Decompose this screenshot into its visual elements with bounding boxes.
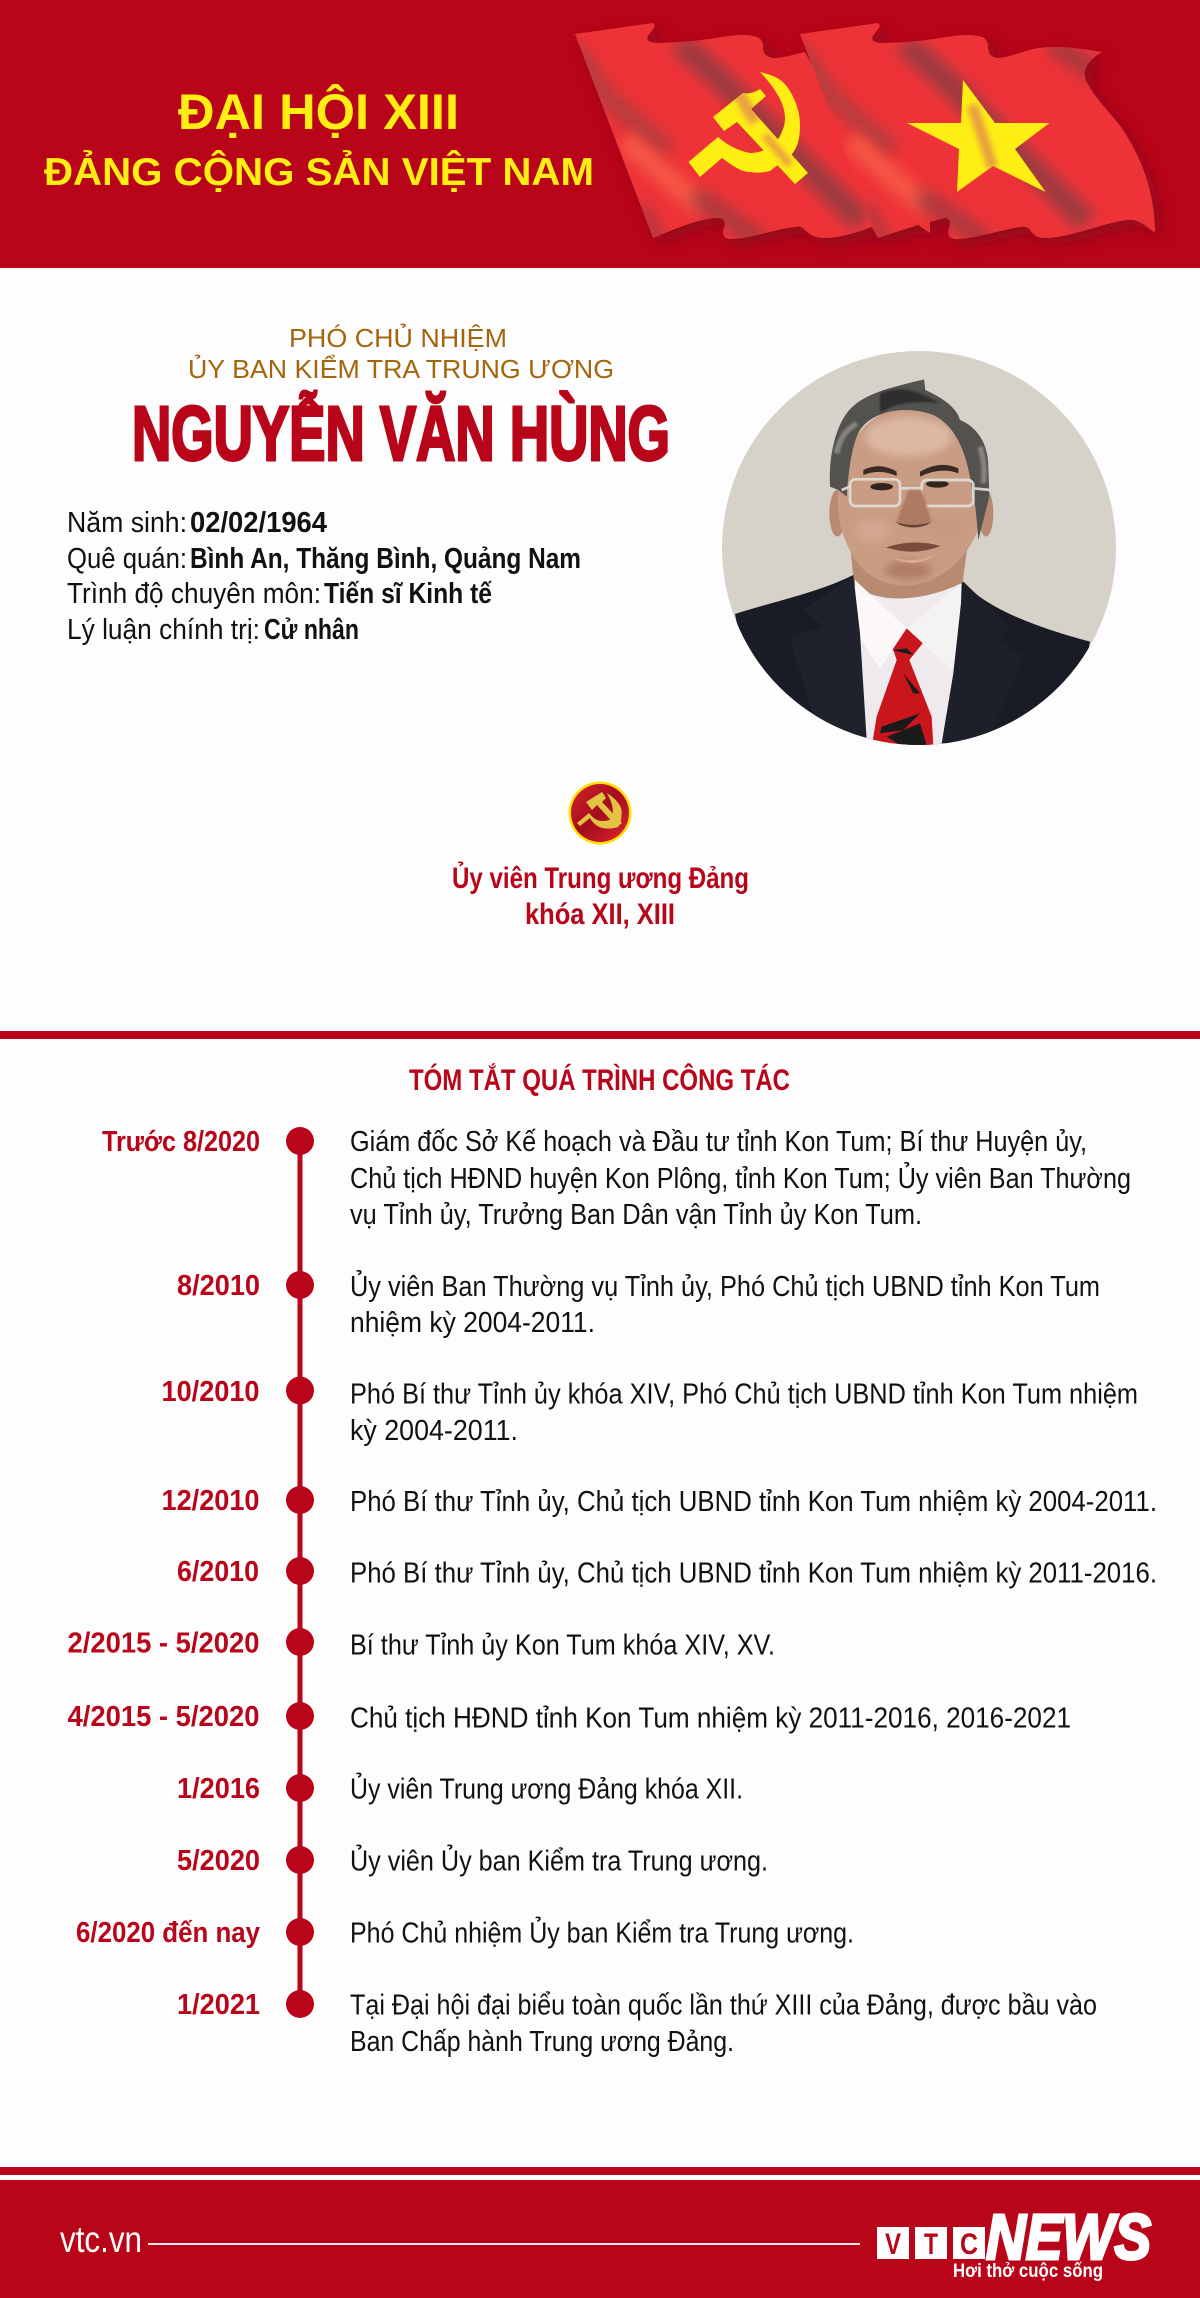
career descriptions: Tại Đại hội đại biểu toàn quốc lần thứ XIII của Đảng, được bầu vào bbox=[350, 1990, 1097, 2022]
membership text line 1: Ủy viên Trung ương Đảng bbox=[452, 861, 749, 895]
icon: party emblem bbox=[568, 782, 632, 844]
membership text line 2: khóa XII, XIII bbox=[525, 898, 675, 931]
dates: Trước 8/2020 bbox=[102, 1126, 260, 1158]
panel: header banner bbox=[0, 0, 1200, 268]
bio details: Lý luận chính trị: bbox=[67, 614, 260, 646]
flag with star bbox=[800, 23, 1155, 239]
name: NGUYỄN VĂN HÙNG bbox=[132, 390, 670, 477]
dates bbox=[68, 1126, 260, 2021]
position line 2: ỦY BAN KIỂM TRA TRUNG ƯƠNG bbox=[188, 353, 614, 384]
logo: VTC News: V bbox=[885, 2228, 901, 2261]
career descriptions: Ủy viên Trung ương Đảng khóa XII. bbox=[350, 1772, 743, 1806]
title line 1: ĐẠI HỘI XIII bbox=[178, 83, 459, 140]
logo: VTC News: C bbox=[960, 2228, 978, 2261]
logo: VTC News: NEWS bbox=[986, 2201, 1151, 2273]
career descriptions: vụ Tỉnh ủy, Trưởng Ban Dân vận Tỉnh ủy Kon Tum. bbox=[350, 1199, 922, 1231]
bio details: Bình An, Thăng Bình, Quảng Nam bbox=[190, 543, 581, 575]
bio details: Tiến sĩ Kinh tế bbox=[324, 578, 493, 610]
heading: career summary: TÓM TẮT QUÁ TRÌNH CÔNG TÁC bbox=[409, 1063, 790, 1097]
career descriptions bbox=[350, 1126, 1157, 2058]
career descriptions: Ban Chấp hành Trung ương Đảng. bbox=[350, 2026, 734, 2058]
bio details: Quê quán: bbox=[67, 543, 187, 575]
flag with hammer and sickle bbox=[575, 23, 878, 239]
dates: 1/2021 bbox=[177, 1989, 260, 2021]
career descriptions: kỳ 2004-2011. bbox=[350, 1415, 518, 1447]
section divider rule bbox=[0, 1031, 1200, 1039]
dates: 6/2020 đến nay bbox=[76, 1917, 260, 1949]
dates: 10/2010 bbox=[162, 1376, 260, 1408]
bio details: 02/02/1964 bbox=[190, 507, 327, 539]
dates: 2/2015 - 5/2020 bbox=[68, 1628, 260, 1660]
icon: hammer and sickle bbox=[688, 72, 808, 184]
logo: VTC News: T bbox=[924, 2228, 938, 2261]
portrait photo bbox=[722, 351, 1116, 773]
career descriptions: Ủy viên Ủy ban Kiểm tra Trung ương. bbox=[350, 1844, 768, 1878]
timeline bbox=[68, 1126, 1157, 2058]
bio details: Cử nhân bbox=[264, 614, 359, 646]
bio details: Năm sinh: bbox=[67, 507, 187, 539]
logo: VTC News: Hơi thở cuộc sống bbox=[953, 2261, 1103, 2282]
flags illustration bbox=[560, 10, 1170, 250]
timeline dots bbox=[286, 1127, 314, 2018]
icon: star bbox=[907, 80, 1050, 192]
panel: party membership bbox=[452, 782, 749, 931]
bio details: Trình độ chuyên môn: bbox=[67, 578, 321, 610]
dates: 12/2010 bbox=[162, 1485, 260, 1517]
career descriptions: Phó Chủ nhiệm Ủy ban Kiểm tra Trung ương. bbox=[350, 1916, 854, 1950]
dates: 4/2015 - 5/2020 bbox=[68, 1701, 260, 1733]
panel: profile bbox=[67, 322, 1116, 773]
career descriptions: Chủ tịch HĐND tỉnh Kon Tum nhiệm kỳ 2011-2016, 2016-2021 bbox=[350, 1702, 1071, 1734]
career descriptions: Ủy viên Ban Thường vụ Tỉnh ủy, Phó Chủ tịch UBND tỉnh Kon Tum bbox=[350, 1269, 1100, 1303]
dates: 8/2010 bbox=[177, 1270, 260, 1302]
footer line bbox=[148, 2243, 860, 2245]
timeline axis bbox=[298, 1141, 302, 2004]
position line 1: PHÓ CHỦ NHIỆM bbox=[289, 322, 507, 353]
panel: footer bbox=[0, 2167, 1200, 2298]
career descriptions: Giám đốc Sở Kế hoạch và Đầu tư tỉnh Kon Tum; Bí thư Huyện ủy, bbox=[350, 1126, 1087, 1158]
website: vtc.vn bbox=[60, 2219, 142, 2260]
dates: 6/2010 bbox=[177, 1556, 259, 1588]
career descriptions: Bí thư Tỉnh ủy Kon Tum khóa XIV, XV. bbox=[350, 1630, 775, 1662]
dates: 1/2016 bbox=[177, 1773, 260, 1805]
title line 2: ĐẢNG CỘNG SẢN VIỆT NAM bbox=[44, 149, 594, 194]
logo: VTC News bbox=[877, 2201, 1151, 2282]
bio details bbox=[67, 507, 581, 646]
career descriptions: nhiệm kỳ 2004-2011. bbox=[350, 1307, 595, 1339]
dates: 5/2020 bbox=[177, 1845, 260, 1877]
